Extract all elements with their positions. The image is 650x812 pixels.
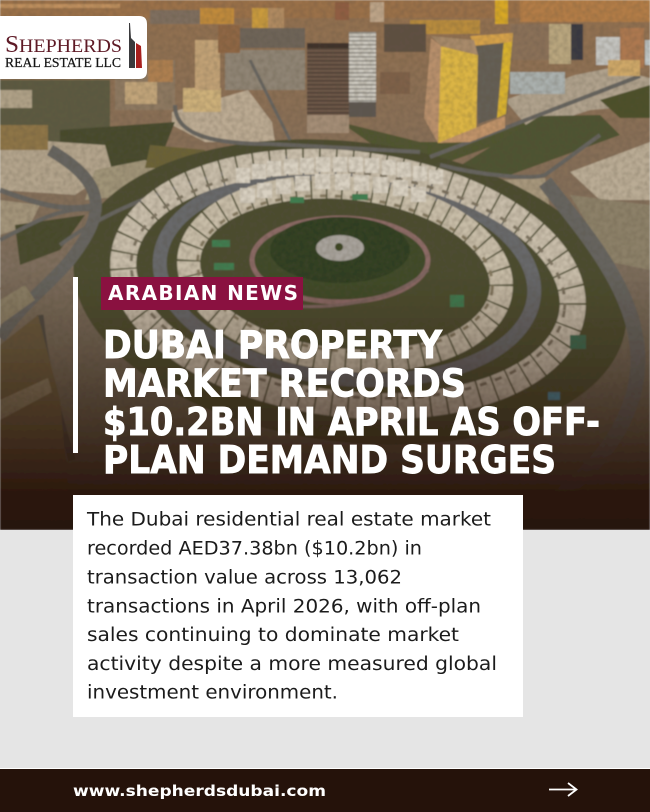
headline: MARKET RECORDS <box>103 362 466 406</box>
villa rings <box>109 137 587 431</box>
accent vertical bar <box>73 277 78 453</box>
tower: yellow and tan pair <box>424 33 513 143</box>
category tag: ARABIAN NEWS <box>108 281 298 305</box>
logo badge <box>0 16 147 79</box>
article summary panel: The Dubai residential real estate market <box>86 510 491 530</box>
central park with rings <box>252 217 428 307</box>
building: top-left mid block <box>0 25 240 150</box>
background photo: aerial view of circular villa community <box>0 0 650 530</box>
logo wordmark: Real Estate LLC: REAL ESTATE LLC <box>5 56 121 71</box>
sand lots and green patches <box>0 50 650 270</box>
headline <box>103 323 600 483</box>
tower: white centre <box>349 32 376 117</box>
article summary panel <box>73 495 523 717</box>
left lower plots <box>0 286 69 484</box>
villa lawns <box>212 194 586 349</box>
article summary panel: transaction value across 13,062 <box>87 568 402 588</box>
article summary panel: transactions in April 2026, with off-plan <box>87 596 481 618</box>
footer bar <box>0 768 650 812</box>
article summary panel: sales continuing to dominate market <box>87 625 459 646</box>
villas: top rows <box>236 157 443 203</box>
tower: dark brown left <box>307 43 349 133</box>
photo texture <box>0 0 650 530</box>
headline: PLAN DEMAND SURGES <box>103 438 556 483</box>
website url: www.shepherdsdubai.com <box>73 782 326 800</box>
article summary panel: investment environment. <box>87 682 338 704</box>
towers: top-right cluster <box>380 24 650 94</box>
category tag <box>101 277 303 310</box>
article summary panel: activity despite a more measured global <box>87 654 497 675</box>
logo wordmark: Shepherds: SHEPHERDS <box>5 32 122 58</box>
logo icon: tower <box>129 23 142 68</box>
city skyline strip <box>0 0 650 52</box>
ring grounds <box>73 138 626 444</box>
headline: DUBAI PROPERTY <box>103 323 443 368</box>
article summary panel: recorded AED37.38bn ($10.2bn) in <box>87 538 422 560</box>
roads <box>0 60 640 510</box>
icon: right arrow <box>549 783 576 796</box>
pool <box>548 392 560 400</box>
bottom dark gradient <box>0 270 650 530</box>
